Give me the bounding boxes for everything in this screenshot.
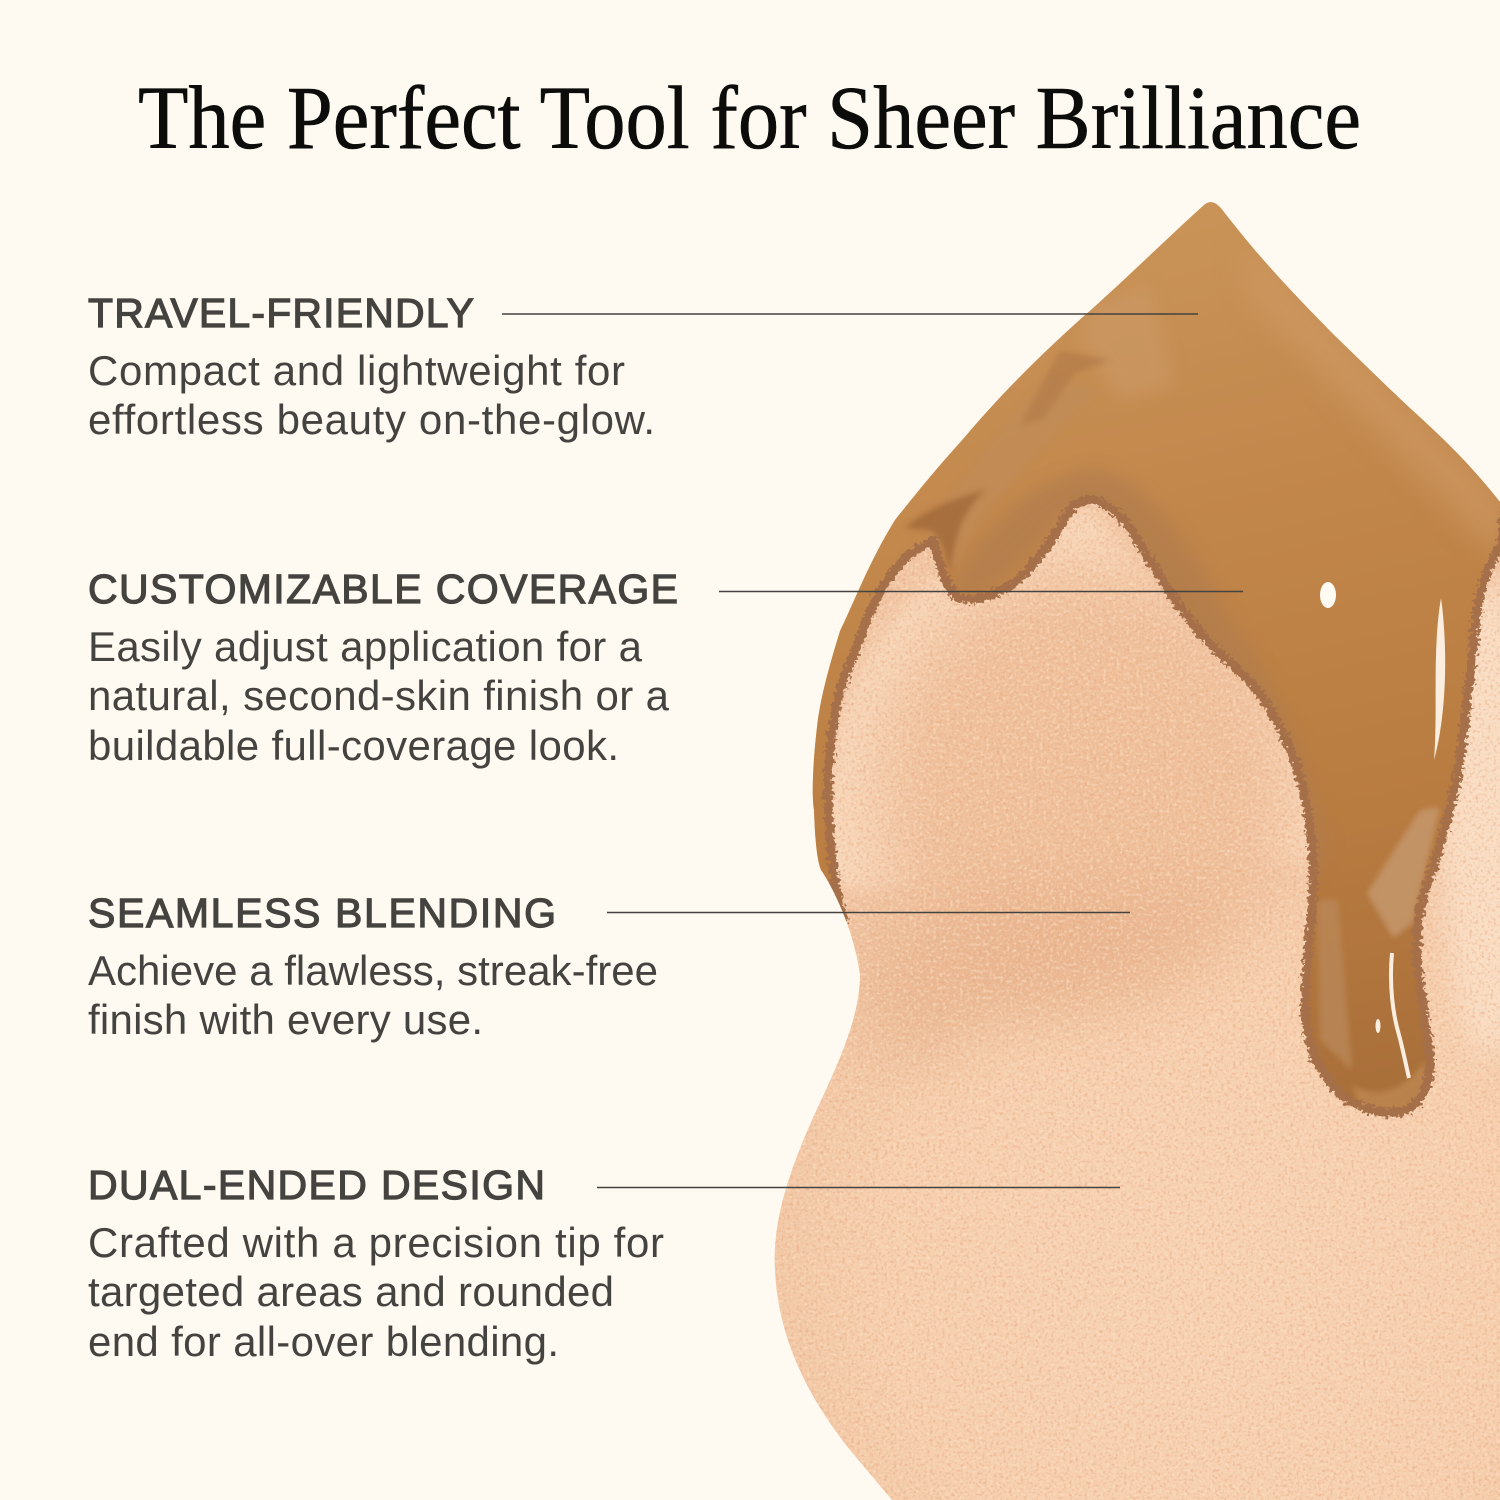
heading: CUSTOMIZABLE COVERAGE <box>88 566 678 612</box>
description: end for all-over blending. <box>88 1318 559 1365</box>
foundation streak highlight <box>1434 598 1445 760</box>
feature: dual-ended design <box>88 1162 1120 1365</box>
description: Crafted with a precision tip for <box>88 1219 664 1266</box>
foundation streak stain <box>1026 352 1103 422</box>
leader line <box>502 313 1198 315</box>
leader line <box>607 912 1130 914</box>
feature: travel-friendly <box>88 290 1198 443</box>
sponge body <box>760 190 1500 1500</box>
heading: SEAMLESS BLENDING <box>88 890 556 936</box>
drip highlight <box>1391 953 1409 1078</box>
leader line <box>597 1186 1120 1188</box>
description: Compact and lightweight for <box>88 347 625 394</box>
sponge darker texture <box>760 190 1500 1500</box>
drip glint <box>1376 1019 1380 1033</box>
foundation left band <box>956 526 970 555</box>
feature: seamless blending <box>88 890 1130 1043</box>
foundation right-edge sheen <box>1261 286 1500 542</box>
sponge waist shadow <box>854 904 1162 1074</box>
sponge upper lobe core <box>880 565 1290 1015</box>
bronze edge of foundation <box>821 494 1500 1120</box>
heading: DUAL-ENDED DESIGN <box>88 1162 545 1208</box>
sponge lighter texture <box>775 504 1500 1500</box>
description: buildable full-coverage look. <box>88 722 619 769</box>
drip light patch <box>1367 807 1440 938</box>
foundation glint <box>1320 582 1336 608</box>
foundation halo around sponge peak <box>956 472 1320 858</box>
sponge upper lobe edge glow <box>824 510 1320 890</box>
description: Easily adjust application for a <box>88 623 643 670</box>
sponge right lobe <box>1440 580 1500 1060</box>
description: natural, second-skin finish or a <box>88 672 670 719</box>
description: Achieve a flawless, streak-free <box>88 947 658 994</box>
drip left sheen <box>1317 900 1352 1070</box>
sponge illustration <box>760 180 1500 1500</box>
title: The Perfect Tool for Sheer Brilliance <box>138 69 1361 168</box>
description: targeted areas and rounded <box>88 1268 614 1315</box>
description: finish with every use. <box>88 996 483 1043</box>
leader line <box>719 590 1243 592</box>
foundation coat <box>812 202 1500 1110</box>
foundation dark stain <box>907 490 982 568</box>
foundation light patch <box>1088 296 1168 395</box>
drip base shine <box>1354 1064 1426 1110</box>
feature: customizable coverage <box>88 566 1243 769</box>
description: effortless beauty on-the-glow. <box>88 396 655 443</box>
heading: TRAVEL-FRIENDLY <box>88 290 474 336</box>
foundation base <box>812 202 1500 1110</box>
